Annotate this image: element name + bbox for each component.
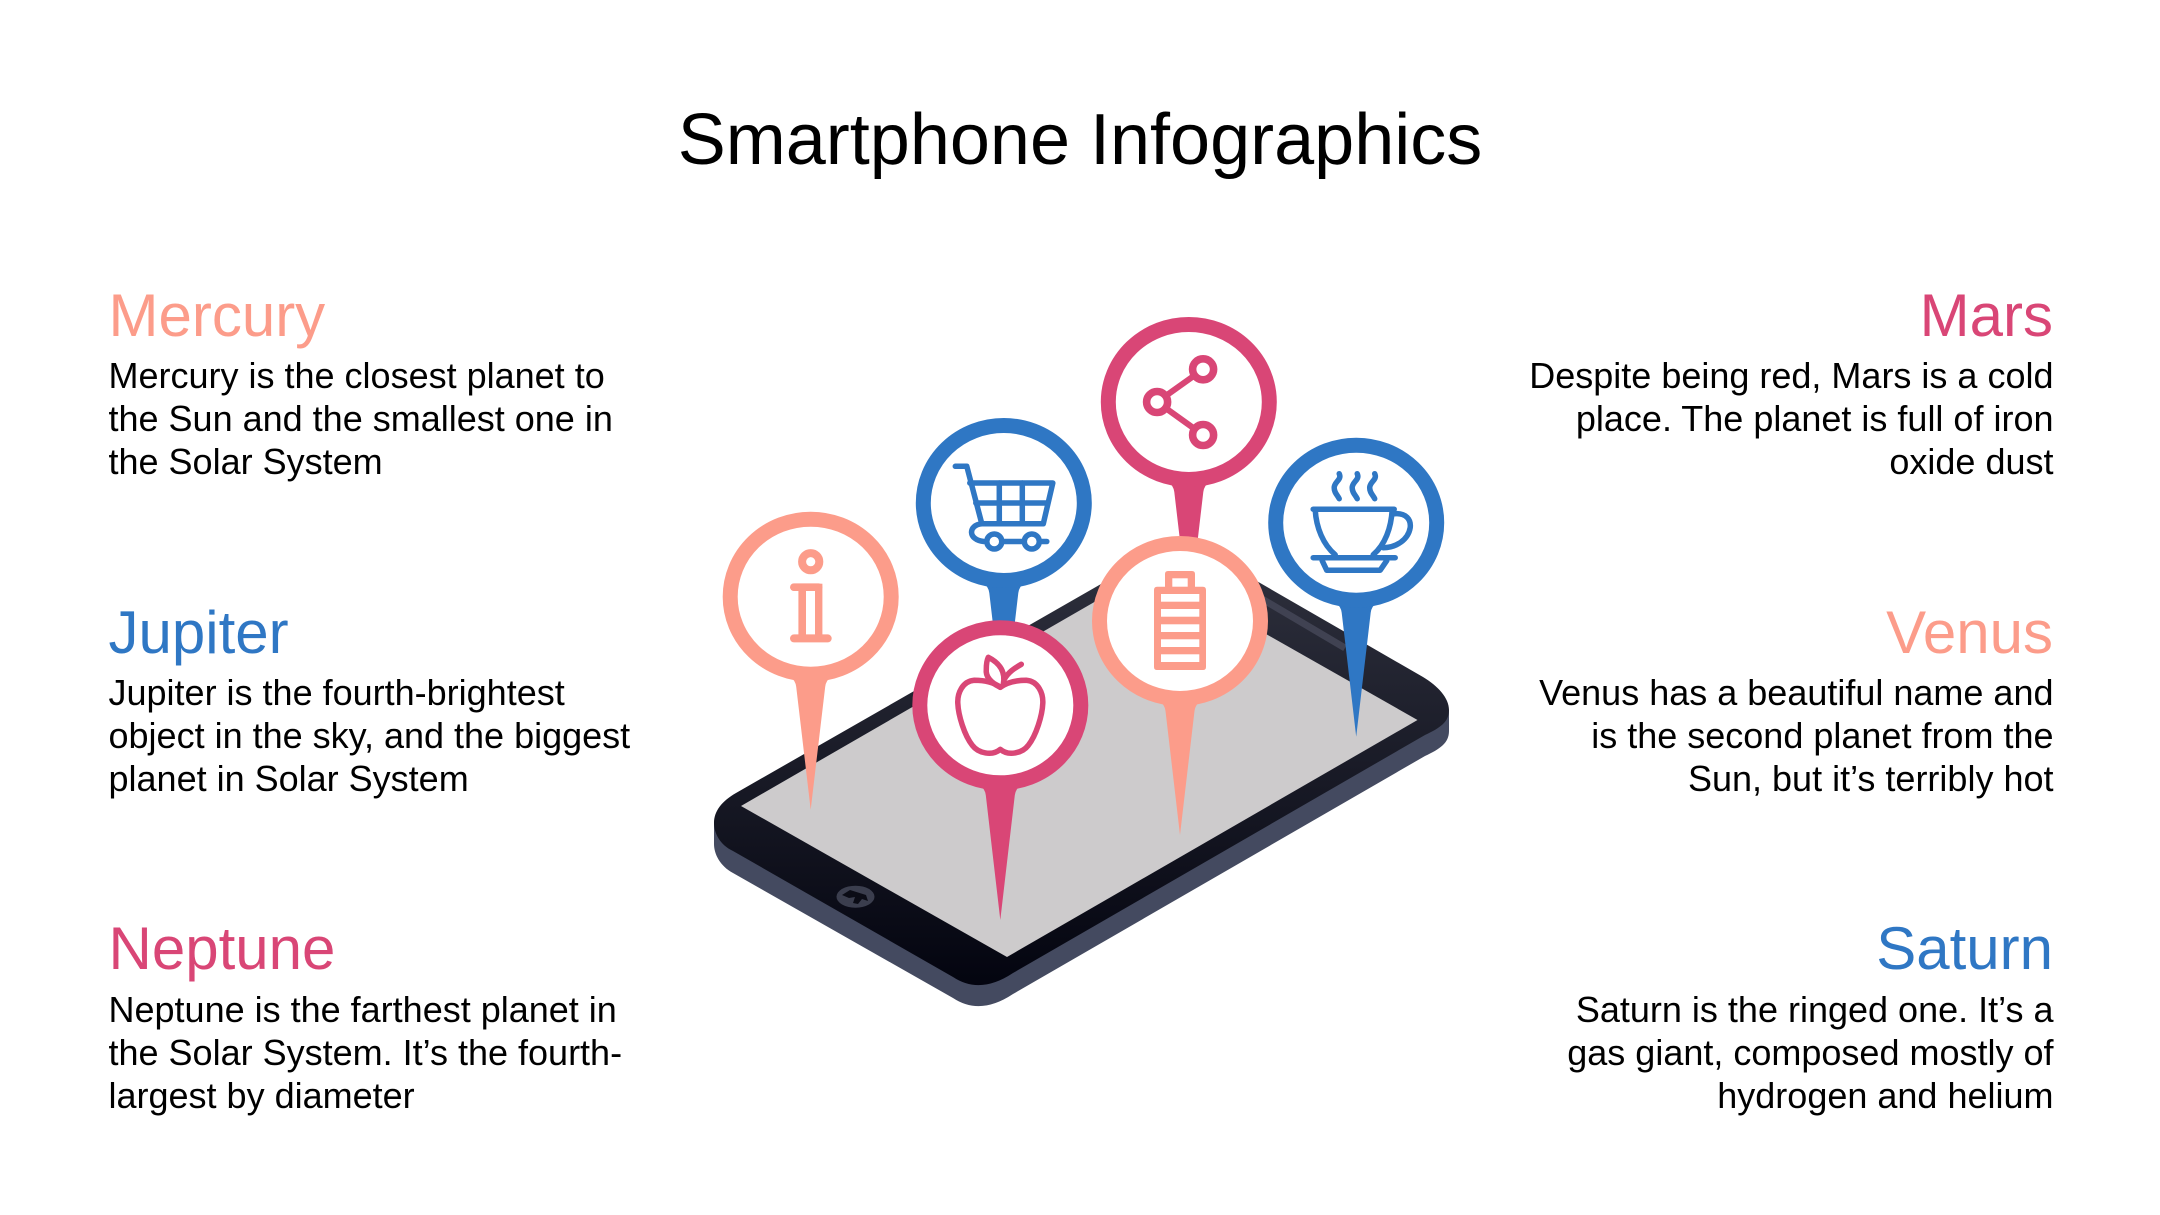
text: Jupiter description: Jupiter is the fourth-brightest	[108, 672, 565, 713]
panel: Venus	[1539, 599, 2054, 799]
text: Mercury description: the Sun and the smallest one in	[108, 398, 613, 439]
panel: Neptune	[108, 915, 622, 1116]
icon: shopping cart	[955, 466, 1053, 549]
heading: Neptune: Neptune	[108, 915, 335, 982]
text: Mars description: oxide dust	[1889, 441, 2054, 482]
icon: info	[790, 553, 832, 642]
text: Venus description: Venus has a beautiful name and	[1539, 672, 2054, 713]
text: Saturn description: hydrogen and helium	[1717, 1075, 2054, 1116]
text: Mars description: place. The planet is full of iron	[1576, 398, 2054, 439]
text: Venus description	[1539, 672, 2054, 799]
text: Saturn description	[1567, 989, 2054, 1116]
text: Jupiter description	[108, 672, 630, 799]
pin: share	[1108, 324, 1269, 616]
pin: apple	[920, 628, 1081, 920]
text: Mercury description	[108, 355, 613, 482]
text: Saturn description: gas giant, composed mostly of	[1567, 1032, 2054, 1073]
title: Smartphone Infographics	[678, 100, 1482, 180]
text: Neptune description: Neptune is the farthest planet in	[108, 989, 617, 1030]
icon: battery	[1154, 571, 1206, 670]
text: Mercury description: Mercury is the closest planet to	[108, 355, 605, 396]
heading: Mercury: Mercury	[108, 282, 325, 349]
text: Neptune description	[108, 989, 622, 1116]
text: Neptune description: the Solar System. It’s the fourth-	[108, 1032, 622, 1073]
text: Mars description: Despite being red, Mars is a cold	[1529, 355, 2054, 396]
phone top face	[714, 547, 1449, 985]
icon: coffee cup	[1313, 474, 1410, 570]
pin: coffee cup	[1276, 445, 1437, 737]
phone screen	[741, 569, 1418, 957]
phone home button	[836, 886, 874, 908]
panel: Jupiter	[108, 599, 630, 799]
heading: Mars: Mars	[1920, 282, 2053, 349]
heading: Saturn: Saturn	[1876, 915, 2053, 982]
heading: Jupiter: Jupiter	[108, 599, 289, 666]
panel: Mercury	[108, 282, 613, 482]
icon: apple	[958, 657, 1043, 753]
text: Neptune description: largest by diameter	[108, 1075, 415, 1116]
text: Venus description: is the second planet from the	[1591, 715, 2054, 756]
text: Venus description: Sun, but it’s terribly hot	[1688, 758, 2054, 799]
text: Mercury description: the Solar System	[108, 441, 383, 482]
text: Mars description	[1529, 355, 2054, 482]
pin: shopping cart	[923, 426, 1084, 717]
icon: share	[1147, 359, 1214, 446]
pin: info	[730, 519, 891, 810]
text: Jupiter description: object in the sky, and the biggest	[108, 715, 630, 756]
phone side edge	[714, 710, 1449, 1006]
text: Jupiter description: planet in Solar System	[108, 758, 469, 799]
text: Saturn description: Saturn is the ringed one. It’s a	[1576, 989, 2054, 1030]
pin: battery	[1100, 544, 1260, 835]
panel: Saturn	[1567, 915, 2054, 1116]
smartphone	[714, 547, 1449, 1006]
heading: Venus: Venus	[1886, 599, 2053, 666]
panel: Mars	[1529, 282, 2054, 482]
phone speaker stripe	[1235, 583, 1345, 648]
